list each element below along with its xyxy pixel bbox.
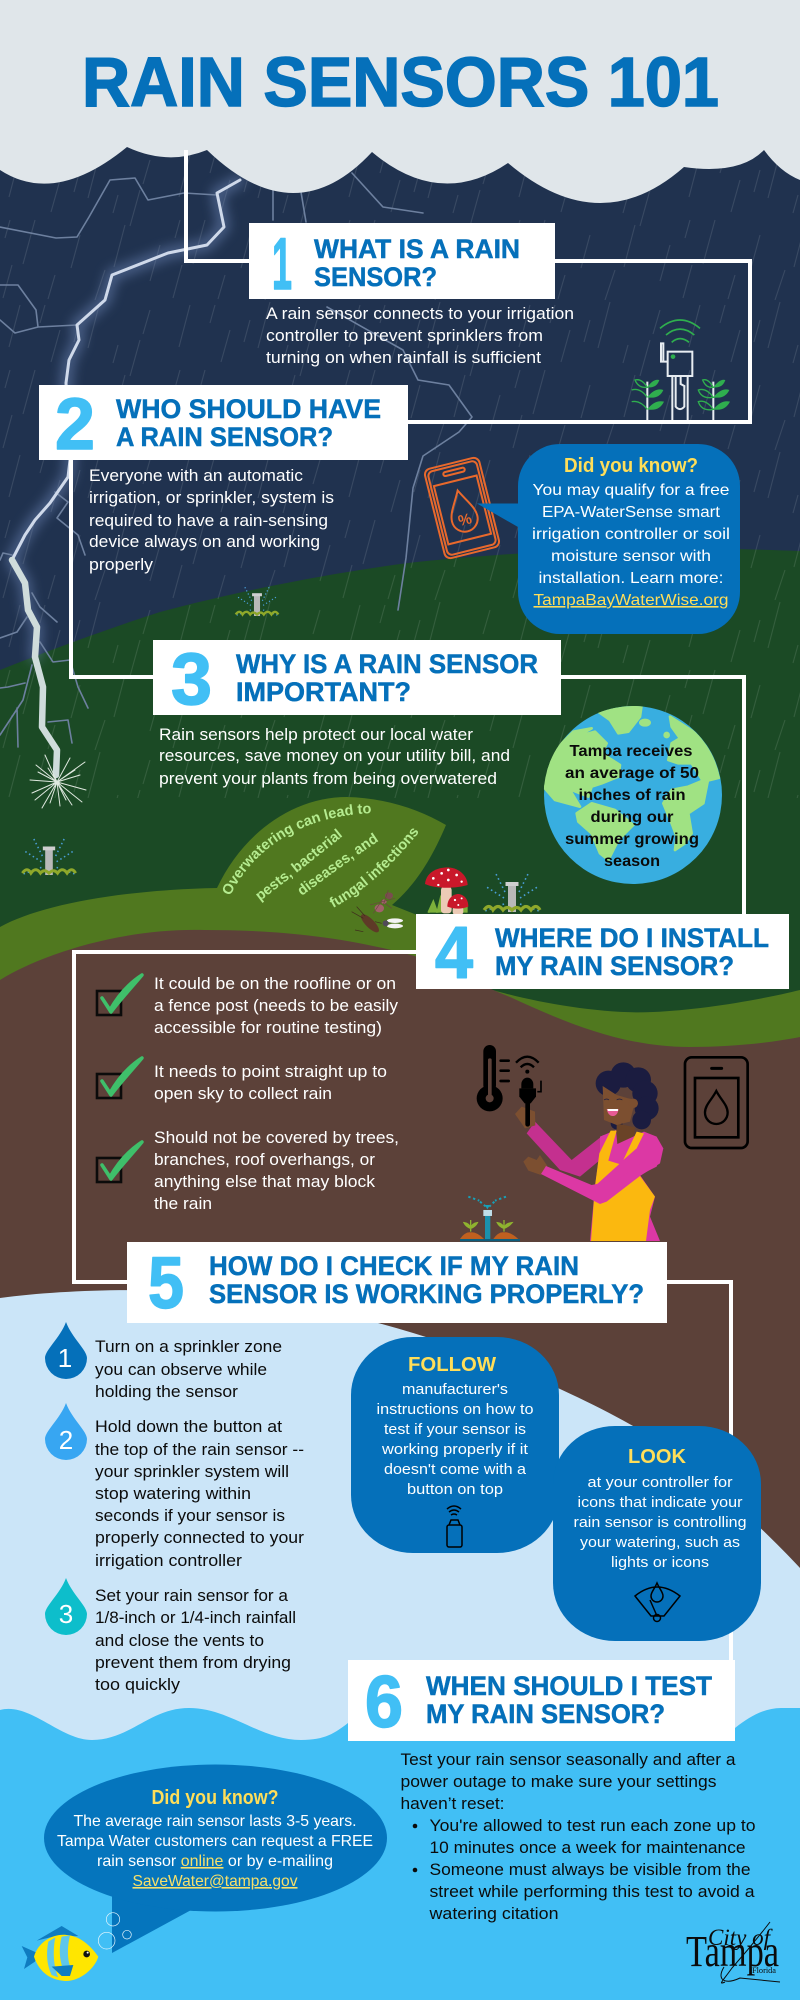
section 3 text: Rain sensors help protect our local water (159, 726, 474, 744)
section 4 item 2: open sky to collect rain (154, 1085, 332, 1103)
step 2 drop: 2 (59, 1425, 73, 1455)
panel: follow: doesn't come with a (384, 1461, 527, 1478)
leaf text: overwatering (222, 804, 418, 908)
icon: mushrooms (425, 867, 468, 915)
globe with rainfall fact: during our (590, 809, 674, 826)
section 4 heading: WHERE DO I INSTALL (495, 923, 769, 953)
light blue ground (0, 1280, 800, 1780)
apron (595, 1131, 619, 1186)
step 1 drop: 1 (58, 1343, 72, 1373)
section 6 text: power outage to make sure your settings (400, 1773, 716, 1791)
section 4 item 2 (154, 1063, 387, 1103)
icon: insects (352, 890, 403, 935)
section 3 heading: WHY IS A RAIN SENSOR (236, 649, 538, 679)
cloud with title area (0, 0, 800, 203)
section 1 text: controller to prevent sprinklers from (266, 327, 543, 345)
step 3 drop: 3 (59, 1599, 73, 1629)
panel: follow: FOLLOW (408, 1354, 496, 1376)
callout: did you know (free sensor): SaveWater@tampa.gov (132, 1873, 298, 1890)
section 3 heading (153, 639, 561, 720)
section 5 heading (127, 1242, 667, 1324)
step 1 drop (45, 1322, 87, 1379)
section 4 heading (416, 913, 789, 994)
section 2 heading: 2 (55, 384, 95, 465)
torso (590, 1130, 663, 1241)
leaf text: overwatering: Overwatering can lead to (222, 804, 371, 894)
icon: sprinkler right (484, 872, 540, 912)
section 6 text (400, 1751, 756, 1923)
checkbox 1 (97, 975, 142, 1015)
section 4 item 1: a fence post (needs to be easily (154, 997, 399, 1015)
section 3 heading: 3 (171, 639, 212, 720)
step 2 text (95, 1418, 305, 1570)
callout: did you know (EPA) (477, 444, 740, 634)
callout: did you know (free sensor): Did you know? (152, 1787, 278, 1809)
section 4 item 1: accessible for routine testing) (154, 1019, 382, 1037)
brown soil (0, 930, 800, 1568)
panel: look (553, 1426, 761, 1641)
panel: follow: test if your sensor is (384, 1421, 526, 1438)
section 1 heading: WHAT IS A RAIN (314, 234, 520, 264)
section 6 heading: WHEN SHOULD I TEST (426, 1671, 712, 1701)
lightning bolt (0, 173, 472, 808)
globe with rainfall fact (542, 705, 723, 884)
logo: City of Tampa (686, 1922, 780, 1983)
callout: did you know (EPA): installation. Learn more: (538, 570, 724, 587)
section 6 text: street while performing this test to avoid a (430, 1883, 755, 1901)
step 2 text: seconds if your sensor is (95, 1507, 285, 1525)
icon: sensor (447, 1506, 462, 1547)
section 6 heading (348, 1660, 735, 1743)
panel: follow: manufacturer's (402, 1381, 508, 1398)
step 2 text: properly connected to your (95, 1529, 305, 1547)
section 1 heading: SENSOR? (314, 262, 437, 292)
step 1 text: you can observe while (95, 1361, 267, 1379)
icon: sprinkler small (236, 586, 278, 616)
front arm and hand (523, 1155, 547, 1175)
step 3 text: too quickly (95, 1676, 181, 1694)
section 4 item 3: anything else that may block (154, 1173, 376, 1191)
section 4 heading: 4 (435, 913, 473, 994)
callout: did you know (EPA): TampaBayWaterWise.org (534, 592, 728, 609)
leaf text: overwatering: fungal infections (330, 828, 418, 908)
icon: rain sensor with plants (632, 320, 730, 420)
section 2 text: properly (89, 556, 154, 574)
panel: follow: button on top (407, 1481, 503, 1498)
panel: look: icons that indicate your (578, 1494, 743, 1511)
section 2 text: required to have a rain-sensing (89, 512, 328, 530)
step 3 text (95, 1587, 296, 1694)
icon: fish with bubbles (22, 1913, 131, 1981)
panel: look: lights or icons (611, 1554, 709, 1571)
icon: phone with percent drop: % (456, 510, 474, 530)
step 2 text: stop watering within (95, 1485, 251, 1503)
callout: did you know (free sensor): rain sensor online or by e-mailing (97, 1853, 333, 1870)
globe with rainfall fact: summer growing (565, 831, 699, 848)
panel: follow (351, 1337, 559, 1553)
light green hill and leaf (0, 797, 800, 1200)
section 3 text: resources, save money on your utility bill, and (159, 747, 510, 765)
step 1 text (95, 1338, 282, 1401)
section 1 text: turning on when rainfall is sufficient (266, 349, 541, 367)
panel: look: rain sensor is controlling (574, 1514, 746, 1531)
section 6 text: You're allowed to test run each zone up to (430, 1817, 756, 1835)
panel: look: at your controller for (588, 1474, 733, 1491)
illustration: woman holding sensor (515, 1062, 663, 1241)
step 3 text: prevent them from drying (95, 1654, 291, 1672)
raised hand (515, 1107, 535, 1128)
logo: City of Tampa: City of (708, 1925, 774, 1950)
section 4 heading: MY RAIN SENSOR? (495, 951, 734, 981)
section 3 heading: IMPORTANT? (236, 677, 411, 707)
step 2 drop (45, 1403, 87, 1460)
step 2 text: your sprinkler system will (95, 1463, 289, 1481)
callout: did you know (EPA): You may qualify for a free (532, 482, 730, 499)
callout: did you know (free sensor) (44, 1764, 387, 1953)
section 2 heading: WHO SHOULD HAVE (116, 394, 381, 424)
step 2 text: Hold down the button at (95, 1418, 282, 1436)
section 4 item 2: It needs to point straight up to (154, 1063, 387, 1081)
step 1 text: holding the sensor (95, 1383, 239, 1401)
section 1 text (266, 305, 574, 367)
section 2 text (89, 467, 334, 574)
section 4 item 3: the rain (154, 1195, 212, 1213)
callout: did you know (free sensor): Tampa Water customers can request a FREE (57, 1833, 373, 1850)
leaf text: overwatering: pests, bacterial (256, 828, 342, 903)
section 5 heading: SENSOR IS WORKING PROPERLY? (209, 1279, 644, 1309)
panel: follow: instructions on how to (376, 1401, 534, 1418)
section 2 text: device always on and working (89, 533, 320, 551)
title: RAIN SENSORS 101 (82, 43, 719, 121)
globe with rainfall fact: season (604, 853, 660, 870)
section 2 heading (39, 384, 408, 465)
callout: did you know (EPA): moisture sensor with (551, 548, 711, 565)
section 2 heading: A RAIN SENSOR? (116, 422, 333, 452)
leaf text: overwatering: diseases, and (298, 832, 378, 895)
icon: handheld sensor (516, 1057, 541, 1103)
section 4 item 1: It could be on the roofline or on (154, 975, 396, 993)
step 1 text: Turn on a sprinkler zone (95, 1338, 282, 1356)
section 6 text: watering citation (428, 1905, 558, 1923)
section 1 text: A rain sensor connects to your irrigation (266, 305, 574, 323)
rain streaks (0, 150, 800, 798)
globe with rainfall fact: Tampa receives (570, 743, 692, 760)
checkbox 2 (97, 1058, 142, 1098)
section 6 text: Someone must always be visible from the (430, 1861, 750, 1879)
section 4 item 3: Should not be covered by trees, (154, 1129, 399, 1147)
step 3 drop (45, 1578, 87, 1635)
neck and head (617, 1123, 635, 1145)
section 3 text (159, 726, 510, 788)
step 2 text: irrigation controller (95, 1552, 243, 1570)
back arm (527, 1122, 603, 1177)
section 6 text: 10 minutes once a week for maintenance (430, 1839, 746, 1857)
section 3 text: prevent your plants from being overwatered (159, 770, 497, 788)
panel: look: LOOK (628, 1446, 687, 1468)
icon: phone with drop (685, 1057, 748, 1148)
step 3 text: and close the vents to (95, 1632, 264, 1650)
hair (596, 1062, 659, 1129)
callout: did you know (EPA): Did you know? (564, 455, 698, 477)
section 4 item 3: branches, roof overhangs, or (154, 1151, 376, 1169)
section 1 heading (249, 223, 555, 305)
dark green hill (0, 549, 800, 1100)
water waves (0, 1708, 800, 2000)
icon: thermometer (477, 1045, 509, 1111)
section 6 heading: 6 (365, 1662, 403, 1743)
callout: did you know (EPA): EPA-WaterSense smart (542, 504, 721, 521)
step 3 text: 1/8-inch or 1/4-inch rainfall (95, 1609, 296, 1627)
section 5 heading: 5 (148, 1243, 184, 1324)
checkbox 3 (97, 1142, 142, 1182)
section 6 heading: MY RAIN SENSOR? (426, 1699, 665, 1729)
icon: sprinkler with seedlings (460, 1197, 520, 1241)
callout: did you know (free sensor): The average rain sensor lasts 3-5 years. (74, 1813, 356, 1830)
icon: sprinkler left (22, 837, 76, 875)
step 3 text: Set your rain sensor for a (95, 1587, 289, 1605)
panel: look: your watering, such as (580, 1534, 740, 1551)
panel: follow: working properly if it (381, 1441, 529, 1458)
section 2 text: irrigation, or sprinkler, system is (89, 489, 334, 507)
section 5 heading: HOW DO I CHECK IF MY RAIN (209, 1251, 579, 1281)
connector lines (71, 150, 750, 1661)
section 6 text: Test your rain sensor seasonally and after a (400, 1751, 736, 1769)
section 2 text: Everyone with an automatic (89, 467, 303, 485)
section 4 item 1 (154, 975, 399, 1037)
callout: did you know (EPA): irrigation controller or soil (532, 526, 730, 543)
logo: City of Tampa: Florida (752, 1966, 776, 1975)
icon: phone with percent drop (424, 457, 500, 559)
globe with rainfall fact: an average of 50 (565, 765, 699, 782)
section 4 item 3 (154, 1129, 399, 1213)
section 6 text: haven’t reset: (400, 1795, 504, 1813)
icon: gauge (635, 1583, 680, 1622)
section 1 heading: 1 (272, 224, 292, 305)
step 2 text: the top of the rain sensor -- (95, 1441, 304, 1459)
globe with rainfall fact: inches of rain (578, 787, 686, 804)
sky background (0, 0, 800, 900)
